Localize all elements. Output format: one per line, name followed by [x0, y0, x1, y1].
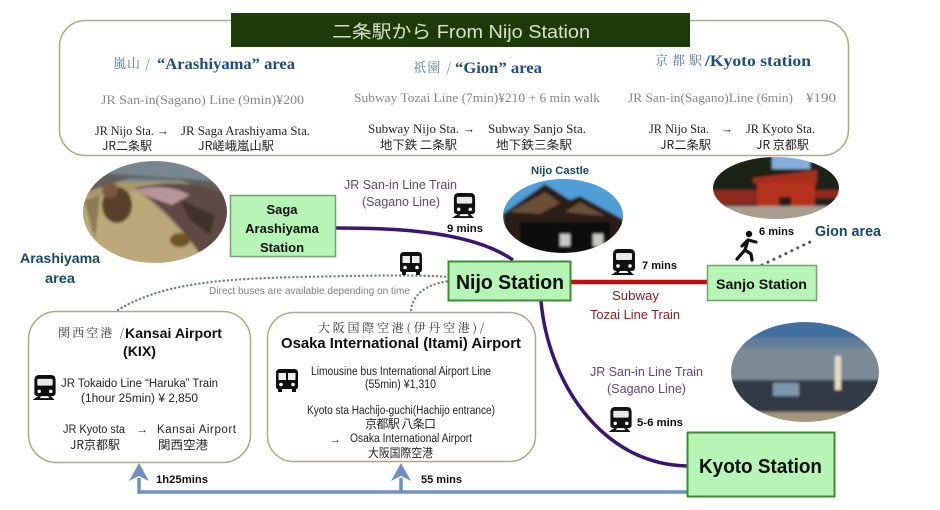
labels: travel annotations: Tozai Line Train [590, 308, 680, 322]
route: Gion: Subway Sanjo Sta. [488, 122, 586, 136]
route: Gion: Subway Nijo Sta. [368, 122, 459, 136]
station: Nijo: Nijo Station [456, 272, 564, 294]
route: Kyoto station: /Kyoto station [704, 53, 811, 70]
photo: Gion shrine gate [713, 157, 839, 219]
photo: Nijo Castle [503, 179, 623, 253]
panel: Osaka Itami Airport: → [329, 434, 341, 446]
route: Kyoto station: JR二条駅 [660, 136, 711, 153]
panel: Kansai Airport: JR Tokaido Line “Haruka” Train [61, 378, 218, 390]
route: Gion: “Gion” area [455, 60, 542, 77]
panel: Osaka Itami Airport: Osaka International (Itami) Airport [281, 335, 521, 352]
station: Nijo [448, 262, 570, 300]
labels: travel annotations [20, 165, 882, 486]
station: Saga Arashiyama: Arashiyama [245, 221, 320, 236]
panel: routes from Nijo Station [60, 20, 848, 156]
labels: travel annotations: Direct buses are available depending on time [209, 286, 410, 297]
labels: travel annotations: 6 mins [759, 226, 794, 238]
panel: Osaka Itami Airport: (55min) ¥1,310 [365, 379, 436, 391]
route: Kyoto station [628, 50, 836, 153]
title banner [231, 13, 690, 47]
panel: Osaka Itami Airport: Osaka International Airport [350, 433, 473, 445]
labels: travel annotations: 9 mins [447, 223, 483, 235]
station: Kyoto: Kyoto Station [699, 456, 822, 478]
route: Arashiyama: 嵐山 / [113, 53, 150, 72]
station: Saga Arashiyama [230, 196, 336, 256]
station: Kyoto [688, 432, 834, 496]
photo: Arashiyama [83, 161, 227, 263]
icon: train to Saga Arashiyama [452, 193, 475, 218]
labels: travel annotations: 7 mins [642, 260, 677, 272]
panel: Kansai Airport: (KIX) [123, 343, 156, 359]
icon: bus [276, 369, 298, 392]
labels: travel annotations: area [45, 270, 75, 286]
title banner: 二条駅から From Nijo Station [332, 22, 590, 42]
icon: train to Sanjo [611, 249, 635, 275]
panel: Osaka Itami Airport: Kyoto sta Hachijo-guchi(Hachijo entrance) [307, 405, 495, 417]
station: Sanjo [708, 266, 816, 300]
route: Arashiyama: “Arashiyama” area [157, 56, 295, 73]
panel: Kansai Airport: 関西空港 [158, 436, 208, 453]
labels: travel annotations: JR San-in Line Train [590, 365, 703, 379]
panel: Kansai Airport: (1hour 25min) ¥ 2,850 [81, 393, 198, 405]
airport connector arrows [129, 463, 687, 492]
labels: travel annotations: 5-6 mins [637, 417, 683, 429]
panel: Osaka Itami Airport [268, 312, 536, 462]
route: Gion: 地下鉄三条駅 [496, 136, 572, 153]
labels: travel annotations: (Sagano Line) [362, 195, 440, 209]
icon: train [32, 375, 56, 400]
route: Arashiyama: JR嵯峨嵐山駅 [198, 137, 274, 154]
labels: travel annotations: (Sagano Line) [607, 382, 686, 396]
route: Arashiyama: JR二条駅 [102, 137, 152, 154]
panel: Kansai Airport: → [136, 424, 148, 436]
labels: travel annotations: Gion area [815, 224, 882, 240]
labels: travel annotations: Nijo Castle [531, 165, 589, 177]
panel: Kansai Airport: Kansai Airport [125, 325, 222, 341]
route: Arashiyama [95, 53, 310, 154]
panel: Kansai Airport: JR Kyoto sta [63, 424, 126, 436]
route: Gion: 祇園 / [413, 57, 451, 76]
route: Kyoto station: → [721, 122, 733, 136]
route: Gion [354, 57, 601, 153]
panel: Kansai Airport: JR京都駅 [70, 436, 120, 453]
labels: travel annotations: 55 mins [421, 474, 462, 486]
panel: Osaka Itami Airport: 京都駅 八条口 [365, 415, 436, 432]
station: Saga Arashiyama: Saga [266, 202, 298, 217]
route: Kyoto station: JR 京都駅 [756, 136, 809, 153]
panel: Osaka Itami Airport: 大阪国際空港 [368, 444, 433, 461]
labels: travel annotations: 1h25mins [156, 474, 208, 486]
station: Sanjo: Sanjo Station [716, 276, 807, 292]
panel: Kansai Airport: 関西空港 / [58, 324, 125, 341]
labels: travel annotations: JR San-in Line Train [344, 178, 457, 192]
panel: Osaka Itami Airport: 大阪国際空港(伊丹空港)/ [318, 319, 485, 336]
route: Arashiyama: JR Saga Arashiyama Sta. [181, 124, 310, 138]
icon: train to Kyoto [608, 407, 632, 432]
labels: travel annotations: Subway [612, 289, 660, 303]
route: Gion: 地下鉄 二条駅 [380, 136, 457, 153]
route: Kyoto station: JR San-in(Sagano)Line (6min) [628, 90, 793, 105]
photo: Kyoto city [728, 320, 882, 425]
icon: walking person [737, 231, 756, 260]
route: Kyoto station: JR Kyoto Sta. [746, 122, 815, 136]
icon: bus to airports [400, 252, 422, 275]
route: Kyoto station: ¥190 [806, 90, 836, 105]
route: Gion: → [463, 122, 475, 136]
route: Gion: Subway Tozai Line (7min)¥210 + 6 min walk [354, 90, 601, 105]
route lines [118, 228, 810, 466]
station: Saga Arashiyama: Station [260, 240, 304, 255]
route: Kyoto station: JR Nijo Sta. [649, 122, 709, 136]
route: Kyoto station: 京都駅 [655, 50, 702, 69]
panel: Kansai Airport [28, 312, 250, 462]
route: Arashiyama: JR Nijo Sta. → [95, 124, 169, 138]
labels: travel annotations: Arashiyama [20, 250, 100, 266]
panel: Kansai Airport: Kansai Airport [157, 424, 237, 436]
route: Arashiyama: JR San-in(Sagano) Line (9min)¥200 [101, 92, 304, 107]
panel: Osaka Itami Airport: Limousine bus International Airport Line [311, 366, 491, 378]
